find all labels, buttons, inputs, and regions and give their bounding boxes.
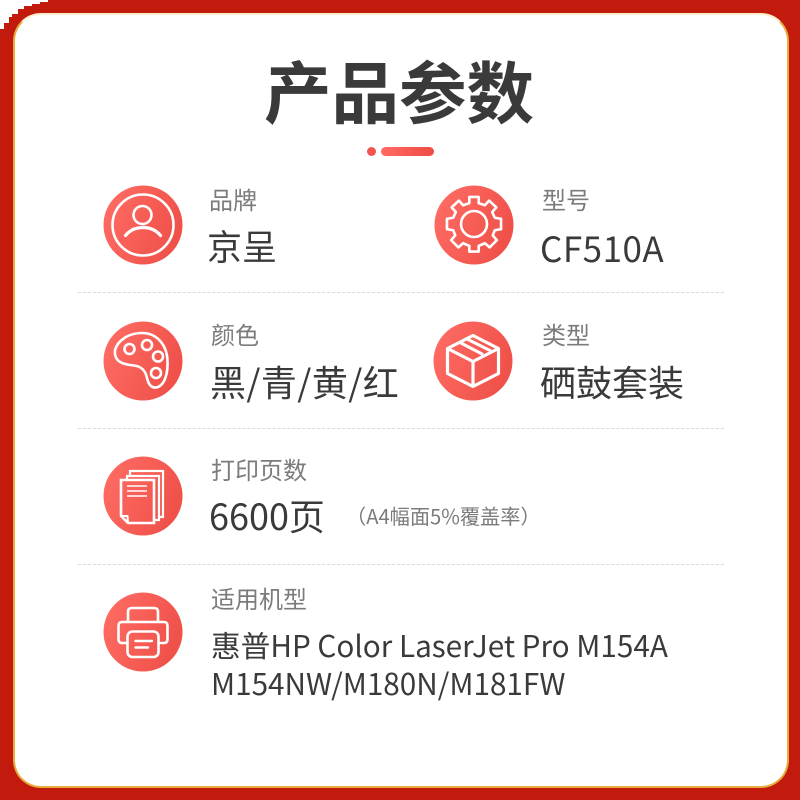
- corner notch: top left: [0, 0, 48, 29]
- icon: stacked pages: [104, 456, 182, 536]
- title: 产品参数: [264, 41, 534, 138]
- icon: brand person: [104, 186, 182, 264]
- value: colour: 黑/青/黄/红: [210, 355, 399, 407]
- note: pages: （A4幅面5%覆盖率）: [346, 501, 541, 530]
- value: model: CF510A: [540, 222, 664, 273]
- value: compatible models line 2: M154NW/M180N/M181FW: [211, 661, 565, 704]
- label: compatible models: 适用机型: [211, 580, 307, 615]
- icon: type box: [434, 322, 512, 400]
- label: type: 类型: [542, 316, 590, 351]
- icon: model gear: [434, 186, 514, 264]
- icon: printer: [104, 592, 182, 672]
- title accent: [367, 147, 434, 156]
- value: type: 硒鼓套装: [540, 355, 684, 407]
- label: model: 型号: [542, 181, 590, 216]
- icon: colour palette: [104, 322, 182, 400]
- value: brand: 京呈: [207, 220, 277, 271]
- value: pages: 6600页: [209, 489, 325, 541]
- value: compatible models line 1: 惠普HP Color LaserJet Pro M154A: [211, 623, 668, 666]
- label: brand: 品牌: [209, 181, 257, 216]
- label: colour: 颜色: [211, 316, 259, 351]
- label: pages: 打印页数: [211, 451, 307, 486]
